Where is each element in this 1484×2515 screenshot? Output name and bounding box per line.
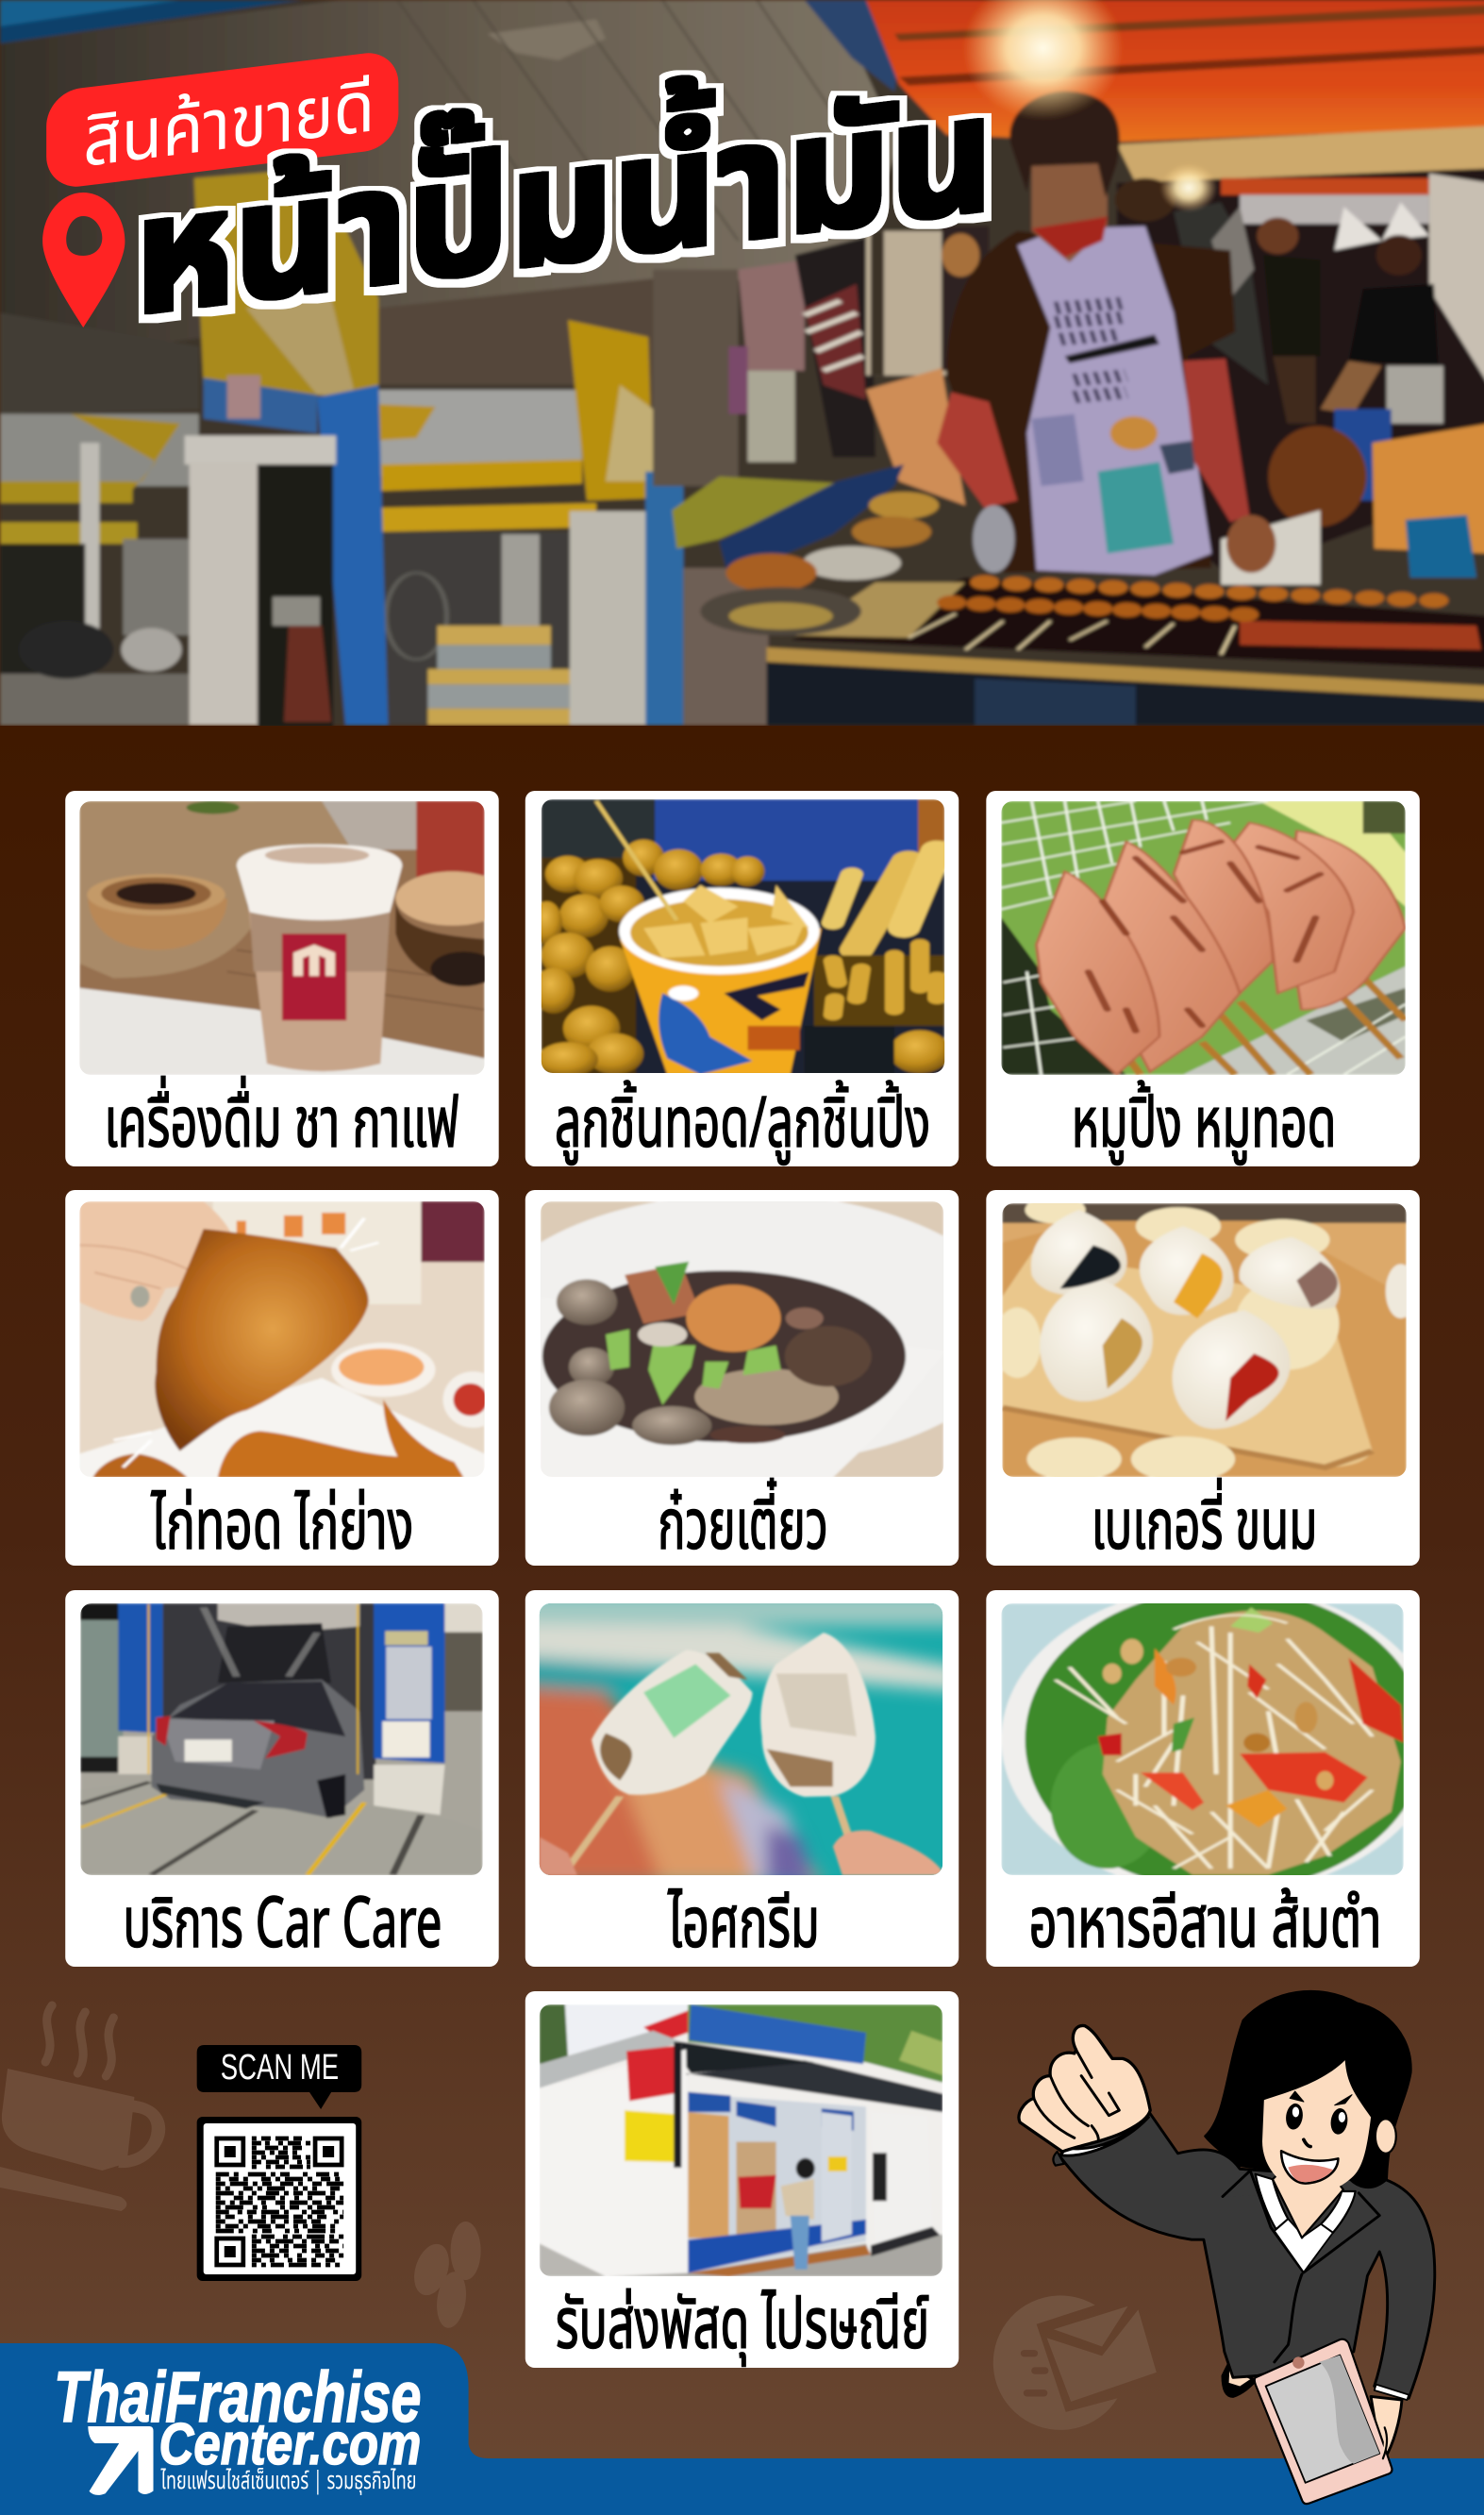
label: เบเกอรี่ ขนม (1092, 1475, 1317, 1581)
page background (0, 726, 1484, 2515)
icon: faint coffee beans (409, 2222, 481, 2330)
panel: noodles card (525, 1190, 959, 1566)
character: businesswoman pointing with tablet (1019, 1991, 1435, 2504)
photo: steamed buns on wooden tray (993, 1197, 1416, 1482)
icon: faint coffee cup (0, 2005, 165, 2211)
label: เครื่องดื่ม ชา กาแฟ (104, 1073, 459, 1179)
heading tag: สินค้าขายดี: สินค้าขายดี (83, 56, 375, 199)
label: รับส่งพัสดุ ไปรษณีย์ (556, 2274, 929, 2380)
photo: fried chicken wings (79, 1201, 504, 1478)
panel: chicken card (65, 1190, 504, 1581)
title: หน้าปั๊มน้ำมัน: หน้าปั๊มน้ำมัน (134, 36, 993, 387)
speech bubble: SCAN ME: SCAN ME (221, 2048, 339, 2087)
panel: car care card (65, 1590, 499, 1979)
footer band (0, 2343, 1484, 2515)
label: ลูกชิ้นทอด/ลูกชิ้นปิ้ง (555, 1073, 930, 1179)
photo: grilled pork skewers (1001, 801, 1406, 1075)
logo: ThaiFranchise Center.com: Center.com (159, 2412, 421, 2477)
photo: papaya salad on banana leaf (1001, 1585, 1441, 1894)
photo: milk tea cup (79, 801, 509, 1075)
QR code (197, 2117, 361, 2281)
panel: som tam card (986, 1585, 1441, 1979)
panel: parcel post card (525, 1991, 959, 2380)
panel: fish balls card (525, 791, 959, 1179)
panel: bakery card (986, 1190, 1420, 1581)
panel: grilled pork card (986, 791, 1420, 1179)
icon: logo arrow (87, 2425, 155, 2496)
label: บริการ Car Care (123, 1873, 442, 1979)
photo: grilled ice cream on sticks (511, 1592, 975, 1885)
logo: ThaiFranchise Center.com: ThaiFranchise (54, 2357, 421, 2438)
label: หมูปิ้ง หมูทอด (1072, 1073, 1337, 1179)
icon: location pin (42, 193, 125, 327)
header photo: gas station and night market (0, 0, 1484, 728)
label: ไอศกรีม (668, 1873, 820, 1979)
panel: ice cream card (511, 1590, 975, 1979)
logo: ThaiFranchise Center.com (54, 2357, 421, 2500)
icon: faint mail (993, 2295, 1157, 2430)
speech bubble: SCAN ME (197, 2045, 361, 2109)
photo: parcel shop front (540, 2004, 942, 2276)
label: ก๋วยเตี๋ยว (658, 1475, 828, 1581)
photo: automatic car wash (80, 1603, 483, 1875)
panel: drinks card (65, 791, 509, 1179)
photo: noodle soup bowl (478, 1194, 1017, 1478)
logo: ThaiFranchise Center.com: ไทยแฟรนไชส์เซ็นเตอร์ | รวมธุรกิจไทย (160, 2462, 416, 2500)
label: ไก่ทอด ไก่ย่าง (151, 1475, 413, 1581)
photo: fried fish balls (532, 799, 950, 1077)
